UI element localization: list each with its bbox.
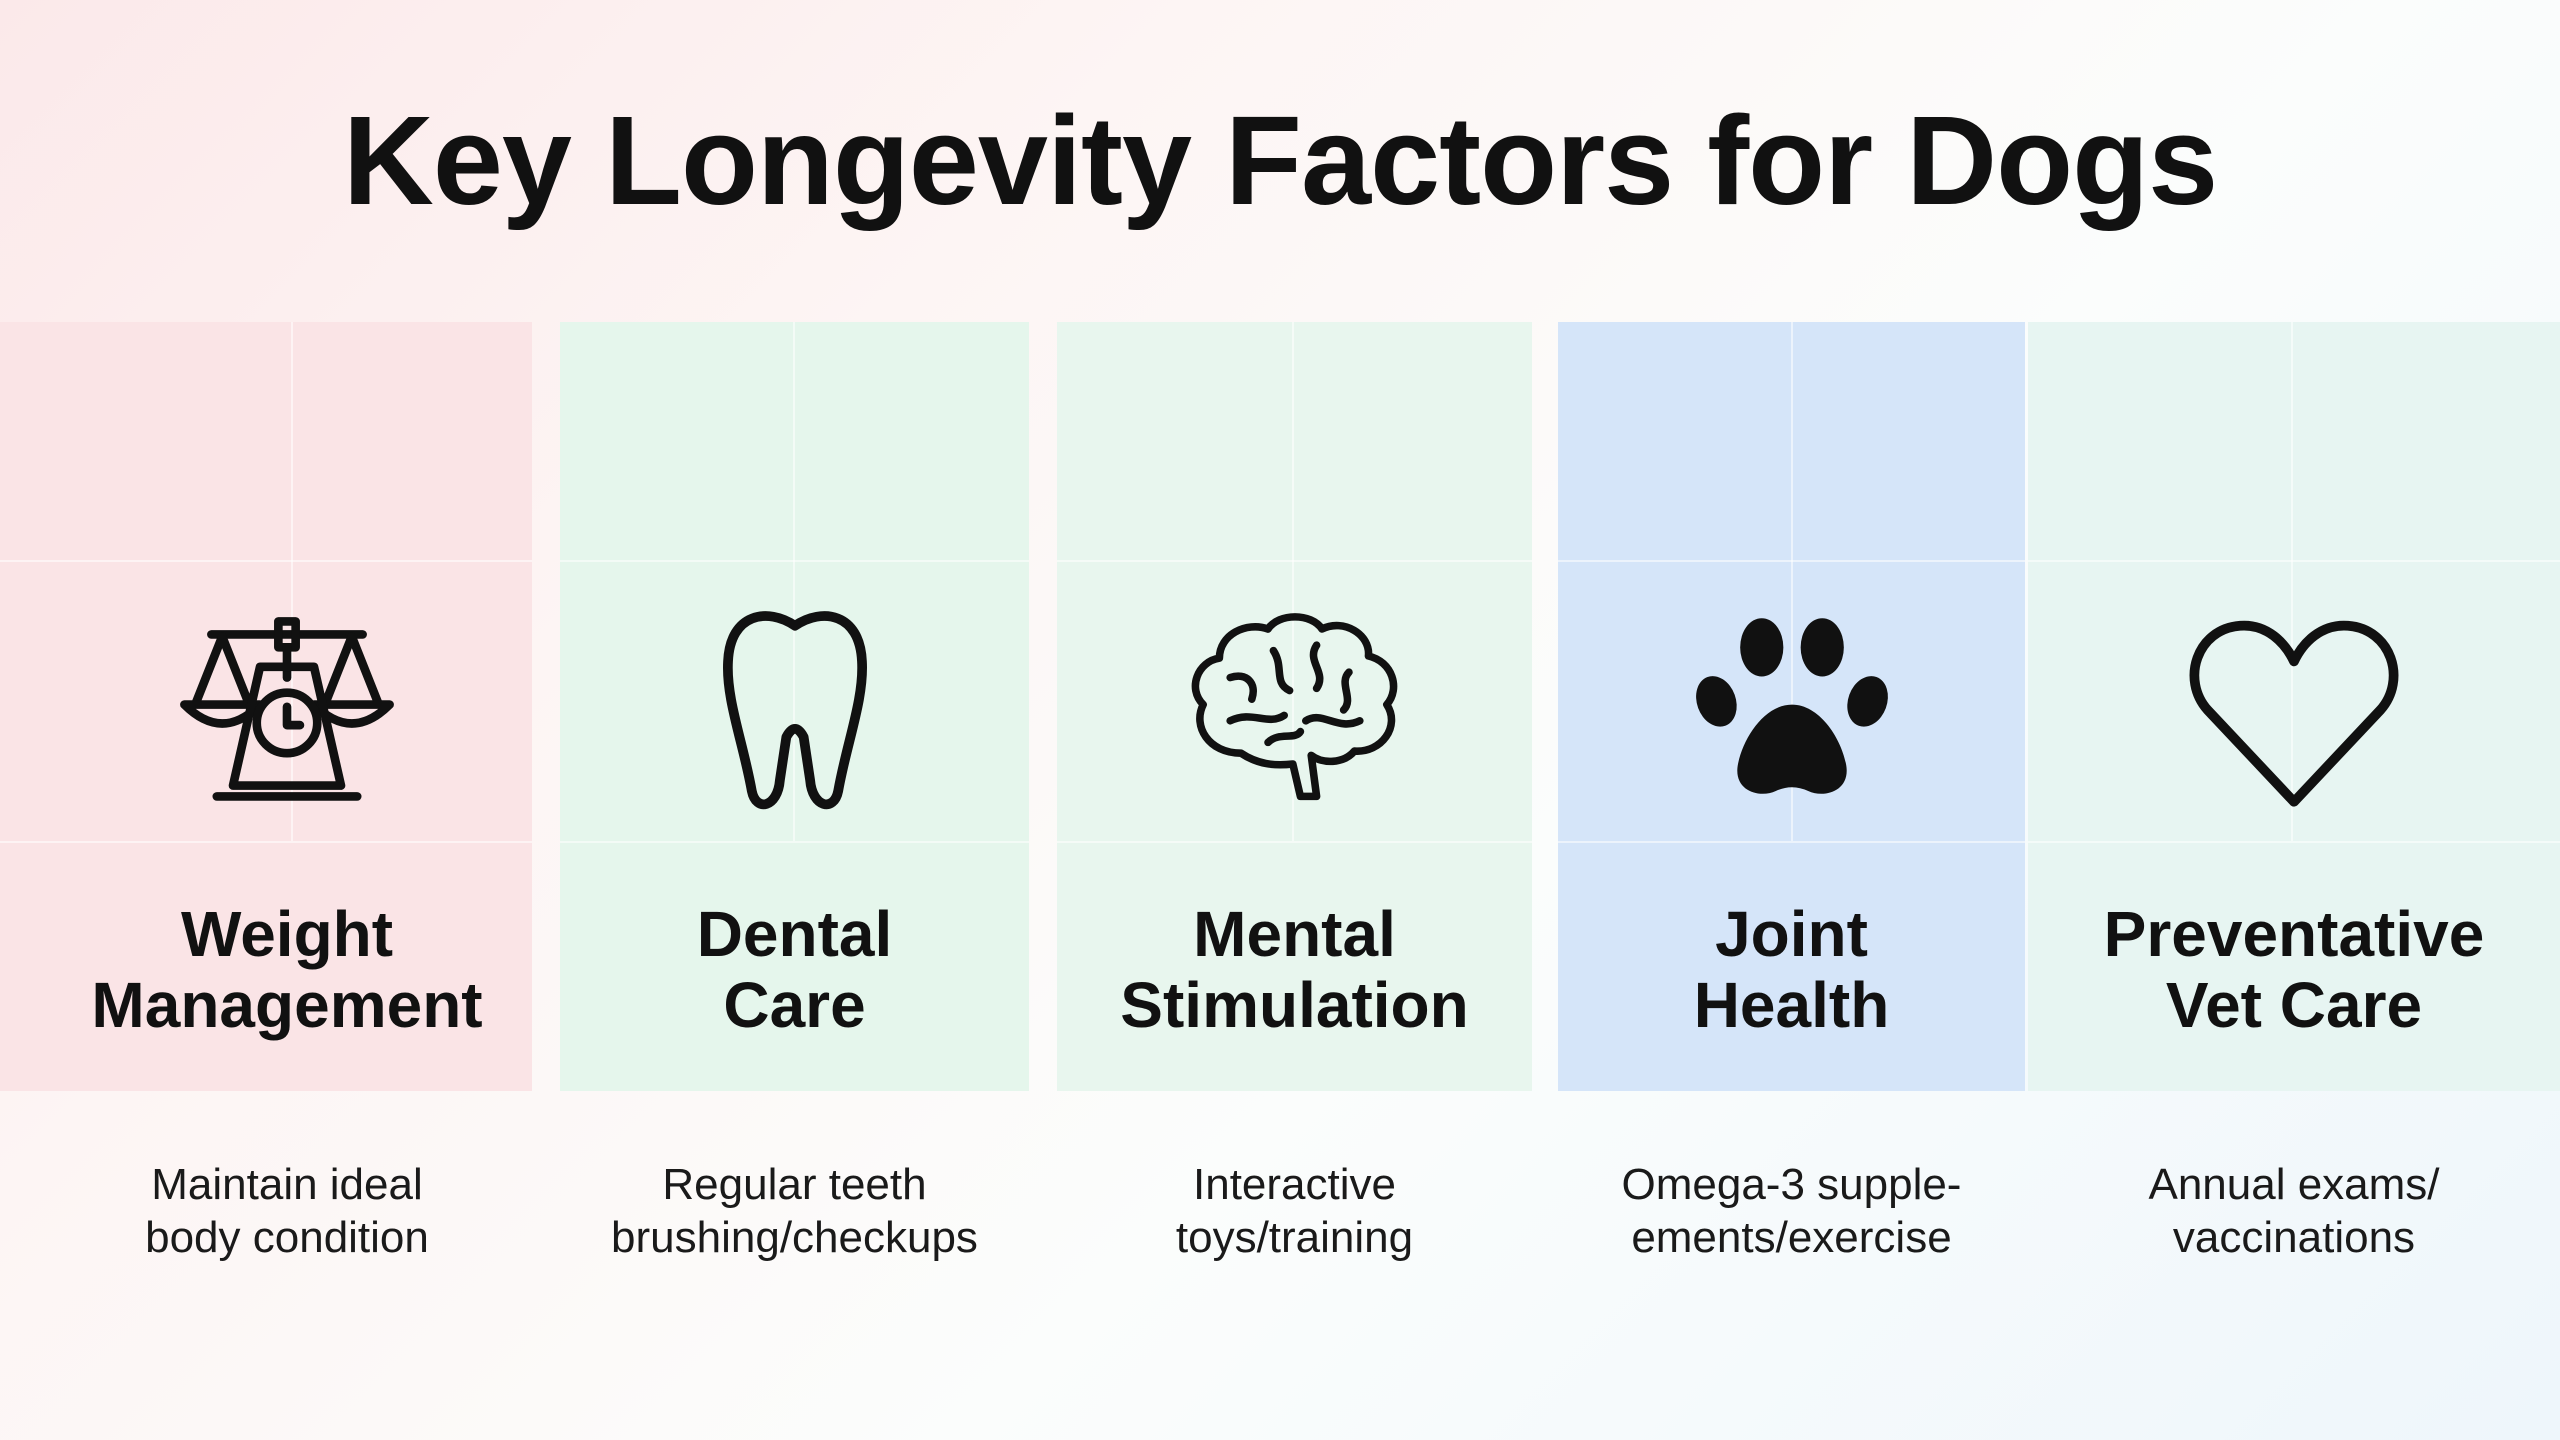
icon: brain [1192, 613, 1398, 800]
heading: Care [723, 969, 866, 1041]
heading [91, 898, 483, 1041]
heading: Weight [181, 898, 393, 970]
heading: Stimulation [1120, 969, 1469, 1041]
heading [2104, 898, 2484, 1041]
icon: heart [2190, 620, 2398, 807]
text: dental description: Regular teeth [662, 1160, 927, 1209]
text: weight description [145, 1160, 429, 1262]
panel: dental care [560, 322, 1029, 1091]
heading: Management [91, 969, 483, 1041]
icon: scale [180, 617, 394, 801]
heading: Joint [1715, 898, 1868, 970]
panel: weight management [0, 322, 532, 1091]
icon: tooth [723, 611, 867, 810]
text: weight description: Maintain ideal [151, 1160, 423, 1209]
text: joint description [1622, 1160, 1961, 1262]
heading: Mental [1193, 898, 1396, 970]
text: vet description [2148, 1160, 2440, 1262]
panel: mental stimulation [1057, 322, 1532, 1091]
panel: joint health [1558, 322, 2025, 1091]
heading: Vet Care [2166, 969, 2422, 1041]
heading: Dental [697, 898, 892, 970]
text: dental description: brushing/checkups [611, 1213, 978, 1262]
text: joint description: ements/exercise [1631, 1213, 1952, 1262]
text: mental description [1176, 1160, 1413, 1262]
heading: Health [1694, 969, 1889, 1041]
text: mental description: Interactive [1193, 1160, 1396, 1209]
heading [1694, 898, 1889, 1041]
title: Key Longevity Factors for Dogs [343, 90, 2217, 231]
heading [697, 898, 892, 1041]
text: mental description: toys/training [1176, 1213, 1413, 1262]
heading: Preventative [2104, 898, 2484, 970]
icon: paw [1696, 618, 1888, 794]
text: vet description: vaccinations [2173, 1213, 2415, 1262]
text: vet description: Annual exams/ [2148, 1160, 2440, 1209]
text: dental description [611, 1160, 978, 1262]
panel: preventative vet care [2028, 322, 2560, 1091]
heading [1120, 898, 1469, 1041]
text: weight description: body condition [145, 1213, 429, 1262]
text: joint description: Omega-3 supple- [1622, 1160, 1961, 1209]
